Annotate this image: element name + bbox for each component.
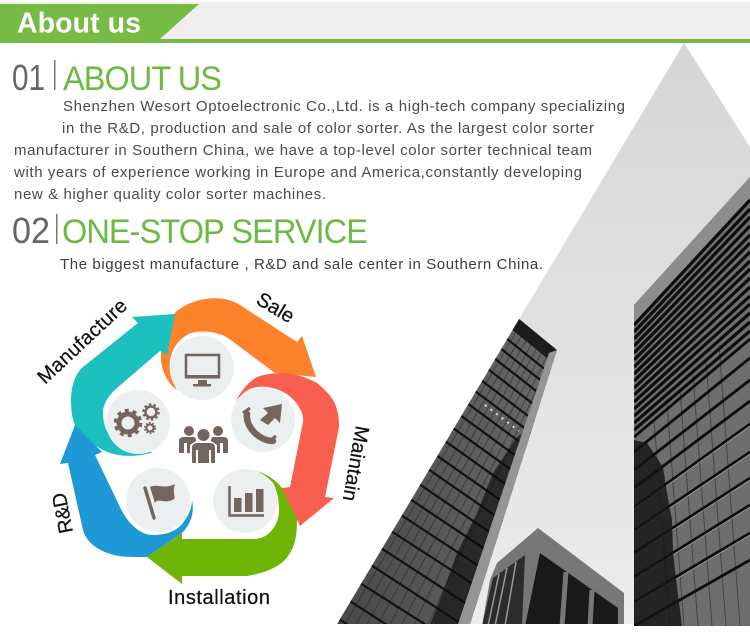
label: Installation: Installation [168, 587, 270, 609]
section 02 heading: 02 [12, 210, 50, 251]
circle: monitor [170, 336, 234, 400]
photo: skyscrapers [330, 43, 750, 628]
section 02 heading: ONE-STOP SERVICE [62, 213, 367, 251]
section 02 text: The biggest manufacture , R&D and sale center in Southern China. [60, 256, 543, 273]
section 01 paragraph: in the R&D, production and sale of color sorter. As the largest color sorter [62, 120, 594, 137]
icon: people [179, 426, 228, 463]
arrow: orange [161, 298, 316, 390]
header band [0, 2, 750, 43]
label: Maintain: Maintain [338, 424, 373, 503]
arrow: blue [60, 425, 193, 557]
section 01 paragraph: with years of experience working in Europe and America,constantly developing [13, 164, 582, 181]
service cycle diagram [33, 288, 373, 609]
low building [482, 528, 624, 626]
circle: flag [126, 468, 190, 532]
header title: About us [17, 8, 141, 40]
section 01 heading [12, 57, 221, 98]
arrow: red [235, 373, 339, 526]
arrow: green [147, 470, 297, 584]
label: Manufacture: Manufacture [33, 295, 132, 389]
section 01 paragraph: new & higher quality color sorter machines. [14, 186, 326, 203]
section 01 paragraph [13, 98, 625, 203]
circle: gears [106, 390, 170, 454]
section 01 paragraph: manufacturer in Southern China, we have a top-level color sorter technical team [14, 142, 592, 159]
right tower [634, 177, 750, 626]
circle: bar chart [213, 469, 277, 533]
label: R&D: R&D [48, 491, 78, 535]
section 01 heading: ABOUT US [63, 60, 221, 98]
circle: phone [231, 388, 295, 452]
label: Sale: Sale [252, 288, 298, 328]
section 01 heading: 01 [12, 57, 45, 98]
section 01 paragraph: Shenzhen Wesort Optoelectronic Co.,Ltd. is a high-tech company specializing [63, 98, 625, 115]
left tower [337, 319, 557, 624]
arrow: teal [71, 314, 175, 456]
